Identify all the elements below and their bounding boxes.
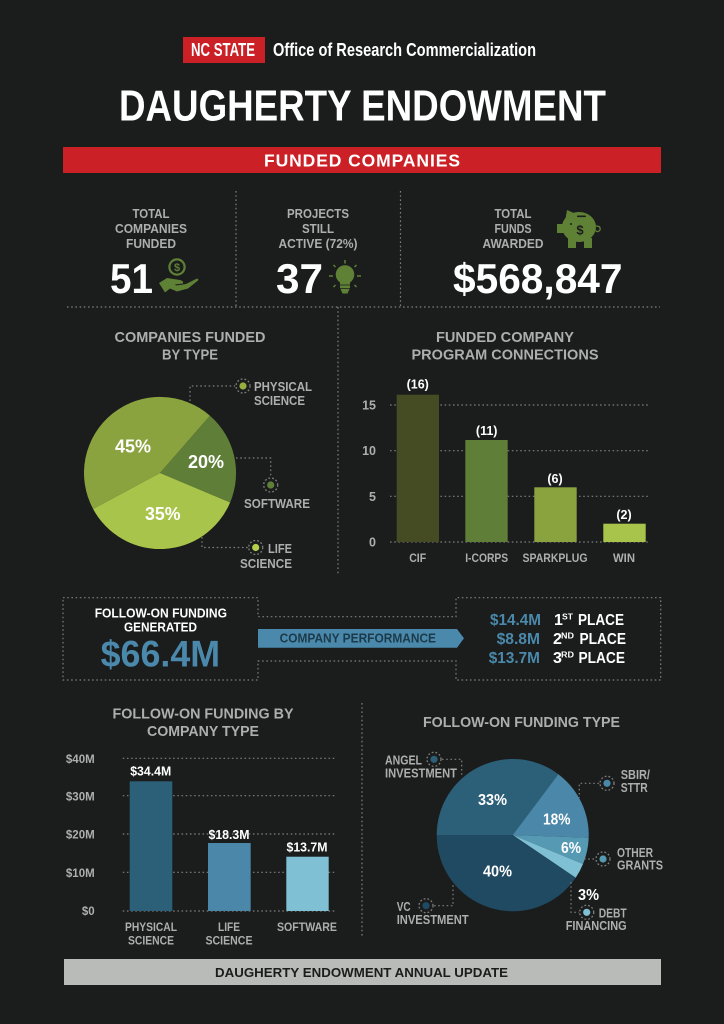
- stat: total funds awarded: AWARDED: [482, 237, 544, 251]
- legend: other grants: GRANTS: [617, 858, 663, 872]
- list: top places: 3: [553, 650, 562, 667]
- icon: piggy bank: $: [576, 222, 584, 238]
- bar chart: LIFE: [218, 922, 240, 934]
- pie chart: [84, 397, 236, 549]
- chart heading: FOLLOW-ON FUNDING TYPE: [423, 714, 620, 731]
- bar chart: $20M: [66, 830, 95, 842]
- pie chart: 20%: [188, 452, 224, 472]
- list: top places: PLACE: [578, 612, 624, 629]
- list: top places: ND: [561, 632, 574, 640]
- pie chart: [437, 759, 589, 911]
- arrow: company performance: [258, 629, 464, 648]
- legend: vc investment: INVESTMENT: [397, 913, 469, 927]
- section banner: funded companies: FUNDED COMPANIES: [264, 150, 460, 170]
- legend: sbir/sttr: SBIR/: [621, 768, 650, 782]
- bar chart: $30M: [66, 792, 95, 804]
- legend: debt financing: FINANCING: [566, 919, 627, 933]
- chart heading: FUNDED COMPANY: [436, 329, 574, 346]
- legend: other grants: [584, 846, 663, 872]
- chart heading: PROGRAM CONNECTIONS: [412, 346, 598, 364]
- text: follow-on funding generated: FOLLOW-ON FUNDING: [95, 605, 227, 620]
- title: DAUGHERTY ENDOWMENT: [119, 82, 606, 130]
- chart heading: [114, 329, 266, 364]
- bar chart: PHYSICAL: [125, 922, 177, 934]
- bar chart: $34.4M: [130, 765, 171, 779]
- legend: debt financing: [566, 882, 627, 933]
- pie chart: 33%: [478, 792, 507, 809]
- panel: follow-on funding type: [385, 714, 663, 933]
- panel: follow-on funding by company type: [66, 706, 337, 948]
- icon: hand holding coin: $: [174, 262, 180, 274]
- bar chart: (11): [476, 424, 497, 438]
- bar chart: $18.3M: [208, 828, 250, 842]
- stat: total funds awarded: TOTAL: [494, 207, 532, 221]
- footer banner: [64, 959, 661, 985]
- legend: angel investment: [385, 752, 462, 780]
- section banner: funded companies: [63, 147, 661, 173]
- legend: angel investment: ANGEL: [385, 754, 422, 768]
- stat: total companies funded: FUNDED: [126, 237, 176, 251]
- stat: total companies funded: 51: [110, 255, 153, 302]
- legend: physical science: PHYSICAL: [254, 380, 312, 394]
- pie chart: 6%: [561, 840, 581, 857]
- bar chart: SPARKPLUG: [522, 553, 588, 565]
- logo: NC STATE: [183, 37, 265, 63]
- legend: other grants: OTHER: [617, 846, 653, 860]
- bar chart: 0: [369, 536, 376, 550]
- stat: total funds awarded: $568,847: [453, 255, 622, 302]
- bar chart: [362, 378, 646, 565]
- legend: physical science: SCIENCE: [254, 394, 305, 408]
- pie chart: 40%: [483, 864, 512, 881]
- chart heading: COMPANY TYPE: [147, 723, 259, 740]
- list: top places: 2: [553, 631, 562, 648]
- bar chart: $10M: [66, 868, 95, 880]
- list: top places: $8.8M: [497, 631, 540, 648]
- stat: projects still active: STILL: [302, 222, 334, 236]
- pie chart: 35%: [145, 504, 180, 524]
- legend: debt financing: 3%: [578, 887, 599, 904]
- bar chart: CIF: [409, 553, 426, 565]
- stat: projects still active: ACTIVE (72%): [278, 237, 358, 251]
- legend: sbir/sttr: [579, 768, 650, 798]
- legend: sbir/sttr: STTR: [621, 781, 648, 795]
- chart heading: [112, 706, 294, 740]
- legend: life science: SCIENCE: [240, 557, 292, 571]
- panel: funded company program connections: [362, 329, 650, 565]
- stat: total funds awarded: [453, 207, 622, 302]
- bar chart: SOFTWARE: [277, 922, 337, 934]
- bar chart: SCIENCE: [128, 936, 174, 948]
- bar chart: WIN: [613, 553, 635, 565]
- legend: life science: LIFE: [268, 542, 292, 556]
- heading: office name: Office of Research Commercialization: [273, 40, 536, 60]
- legend: life science: [202, 537, 292, 571]
- list: top places: [489, 612, 626, 667]
- bar chart: 10: [362, 444, 376, 458]
- legend: vc investment: [397, 884, 469, 927]
- bar chart: $0: [82, 906, 95, 918]
- legend: debt financing: DEBT: [599, 906, 627, 920]
- chart heading: BY TYPE: [162, 346, 218, 364]
- panel: companies funded by type: [84, 329, 312, 571]
- list: top places: RD: [561, 650, 574, 660]
- stat: total companies funded: [110, 207, 198, 302]
- stat: total funds awarded: FUNDS: [494, 222, 532, 236]
- footer banner: DAUGHERTY ENDOWMENT ANNUAL UPDATE: [215, 965, 508, 980]
- bar chart: SCIENCE: [206, 936, 253, 948]
- arrow: company performance: COMPANY PERFORMANCE: [280, 630, 436, 646]
- bar chart: 15: [362, 398, 376, 412]
- legend: software: [236, 458, 310, 511]
- bar chart: [66, 754, 337, 948]
- list: top places: $13.7M: [489, 650, 540, 667]
- list: top places: 1: [554, 612, 563, 629]
- pie chart: 18%: [543, 811, 570, 828]
- legend: vc investment: VC: [397, 900, 411, 914]
- bar chart: $13.7M: [286, 841, 328, 855]
- bar chart: 5: [369, 490, 376, 504]
- stat: projects still active: 37: [276, 255, 323, 302]
- stat: projects still active: [276, 207, 361, 302]
- stat: total companies funded: TOTAL: [132, 207, 170, 221]
- list: top places: $14.4M: [490, 612, 541, 629]
- bar chart: I-CORPS: [465, 553, 508, 565]
- bar chart: (2): [616, 508, 632, 522]
- bar chart: (6): [547, 472, 563, 486]
- legend: physical science: [190, 379, 312, 408]
- text: follow-on funding generated: GENERATED: [124, 620, 197, 635]
- chart heading: COMPANIES FUNDED: [114, 329, 266, 346]
- list: top places: PLACE: [580, 631, 626, 648]
- panel: company performance: [63, 598, 661, 680]
- chart heading: [412, 329, 598, 364]
- stat: total companies funded: COMPANIES: [115, 222, 187, 236]
- chart heading: FOLLOW-ON FUNDING BY: [112, 706, 294, 722]
- text: follow-on funding generated: $66.4M: [101, 634, 220, 675]
- icon: light bulb: [329, 260, 361, 294]
- icon: piggy bank: [557, 210, 600, 248]
- bar chart: (16): [407, 378, 429, 392]
- bar chart: $40M: [66, 754, 95, 766]
- list: top places: PLACE: [578, 650, 625, 667]
- list: top places: ST: [562, 612, 573, 622]
- legend: software: SOFTWARE: [244, 497, 310, 511]
- logo: NC STATE: NC STATE: [191, 40, 255, 60]
- stat: projects still active: PROJECTS: [287, 207, 349, 221]
- legend: angel investment: INVESTMENT: [385, 766, 457, 780]
- text: follow-on funding generated: [95, 605, 227, 675]
- pie chart: 45%: [115, 437, 151, 457]
